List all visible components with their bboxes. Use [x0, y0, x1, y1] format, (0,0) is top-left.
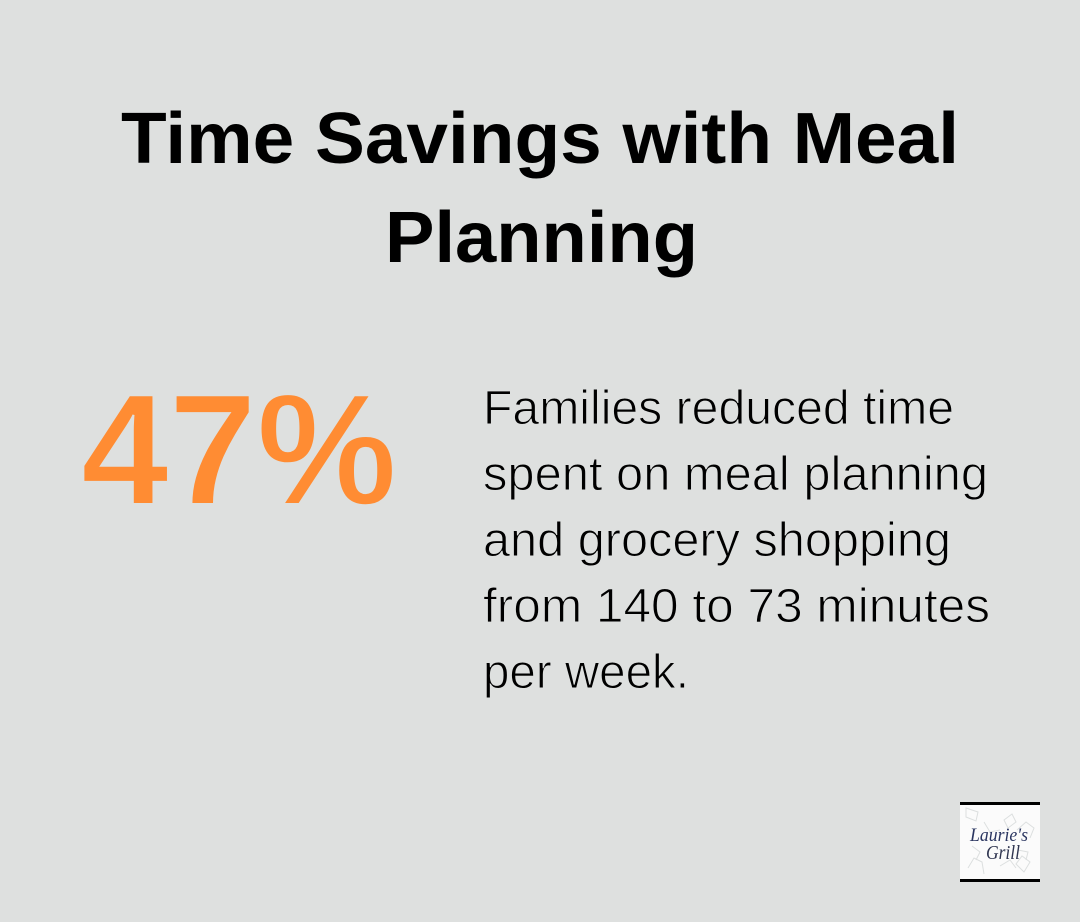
title	[121, 99, 959, 278]
description text: from 140 to 73 minutes	[483, 580, 990, 633]
description text: and grocery shopping	[483, 514, 951, 567]
logo: Laurie's Grill	[960, 802, 1040, 882]
description text: Families reduced time	[483, 382, 954, 435]
title: Planning	[385, 198, 698, 278]
title: Time Savings with Meal	[121, 99, 959, 179]
big statistic: 47%: 47%	[81, 362, 397, 538]
description text	[483, 382, 990, 699]
logo: Laurie's Grill: Laurie's	[969, 825, 1028, 846]
description text: spent on meal planning	[483, 448, 988, 501]
logo: Laurie's Grill: Grill	[986, 842, 1020, 864]
description text: per week.	[483, 646, 689, 699]
